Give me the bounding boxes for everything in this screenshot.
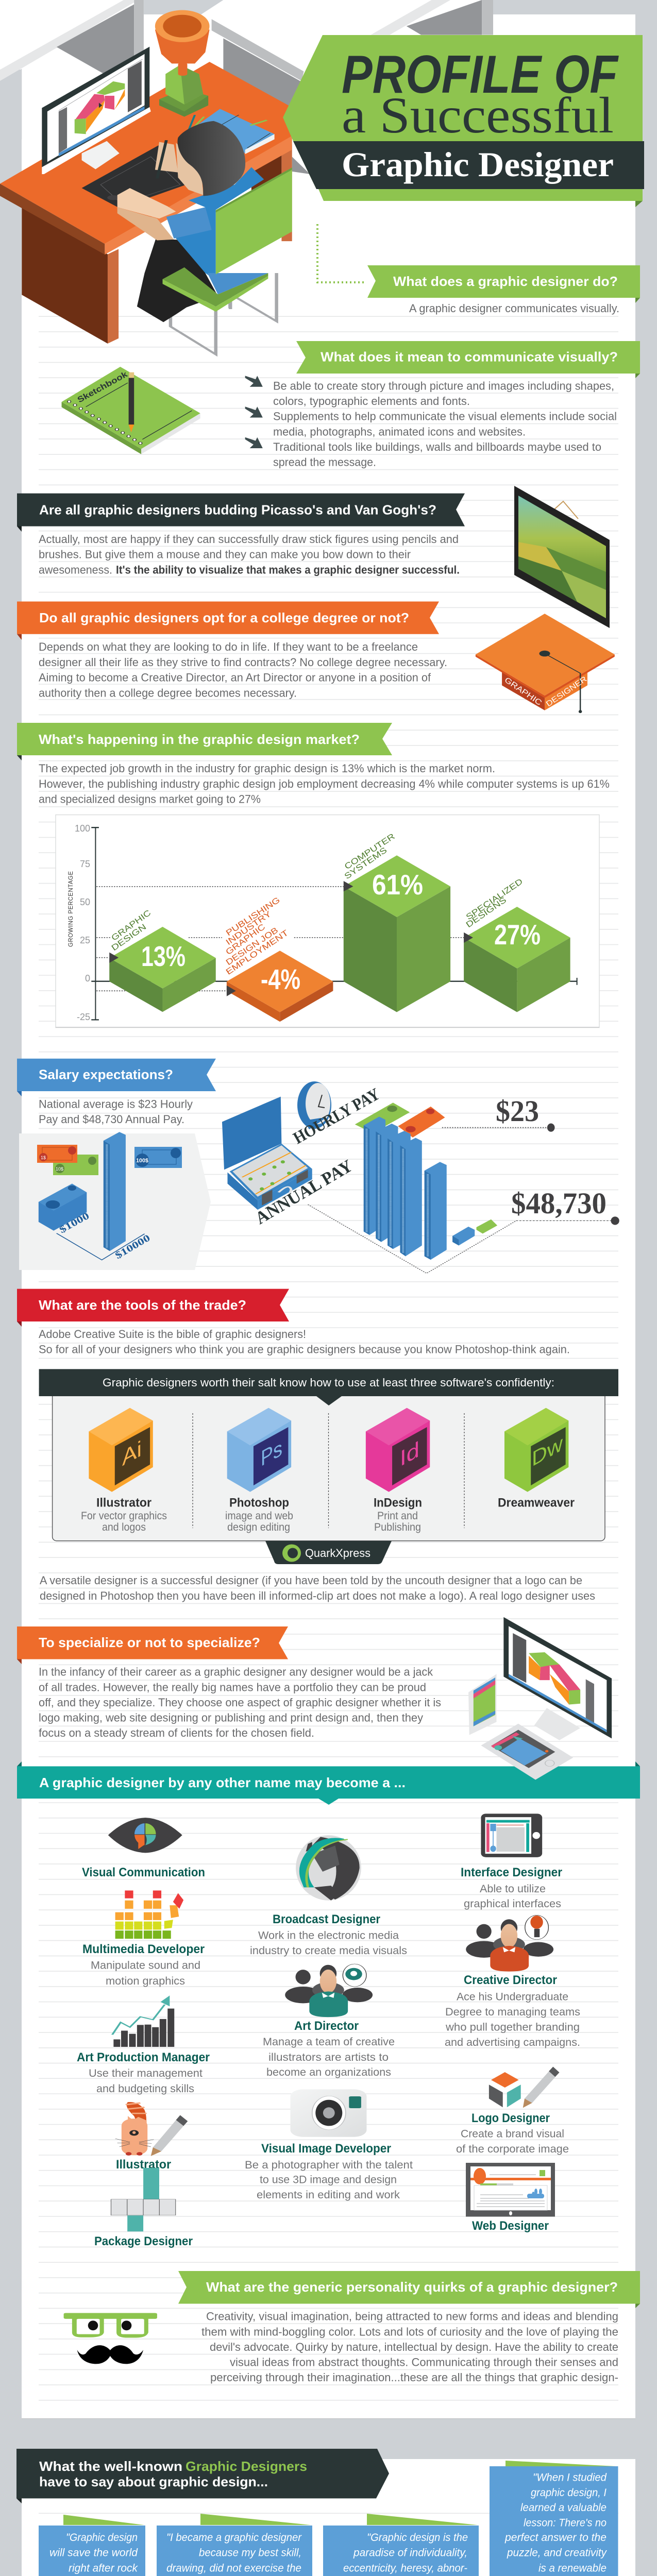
role: creative director: and advertising campaigns. bbox=[445, 2037, 580, 2048]
software: InDesign: Publishing bbox=[374, 1521, 421, 1533]
banner: Picasso and Van Gogh bbox=[17, 494, 465, 532]
desk top bbox=[0, 62, 318, 255]
chair back bbox=[216, 167, 292, 274]
text: Picasso paragraph: Actually, most are happy if they can successfully draw stick figures using pencils and bbox=[39, 533, 459, 546]
banner: any other name: A graphic designer by any other name may become a ... bbox=[39, 1775, 406, 1790]
axis labels: 25 bbox=[80, 935, 90, 945]
role: art director: become an organizations bbox=[266, 2066, 391, 2078]
software: Illustrator bbox=[81, 1408, 167, 1533]
bar: specialized designs 27%: DESIGNS bbox=[465, 896, 508, 929]
role: broadcast designer: Work in the electronic media bbox=[258, 1929, 399, 1941]
banner: personality quirks: What are the generic personality quirks of a graphic designer? bbox=[206, 2279, 618, 2295]
quote card: David Carson: right after rock bbox=[69, 2562, 138, 2574]
designer torso bbox=[167, 167, 264, 280]
text: personality paragraph: Creativity, visual imagination, being attracted to new forms and ideas and blending bbox=[206, 2310, 618, 2323]
banner: salary expectations bbox=[17, 1059, 216, 1096]
banner: personality quirks bbox=[178, 2271, 640, 2308]
software: InDesign: InDesign bbox=[374, 1496, 422, 1510]
bar: publishing -4% bbox=[224, 895, 333, 1022]
quote card: Biz Stone: learned a valuable bbox=[520, 2502, 607, 2514]
bill: orange one dollar bbox=[37, 1145, 77, 1163]
text: market paragraph bbox=[39, 762, 610, 806]
title line 1: PROFILE OF bbox=[342, 45, 619, 105]
text: bullet list: media, photographs, animated icons and websites. bbox=[273, 425, 526, 438]
quote card: George Santayana: paradise of individuality, bbox=[353, 2547, 467, 2559]
software: Photoshop: design editing bbox=[227, 1521, 290, 1533]
role: creative director: Creative Director bbox=[464, 1973, 557, 1987]
quote card: Biz Stone: "When I studied bbox=[533, 2472, 607, 2484]
role: visual communication: Visual Communication bbox=[82, 1866, 205, 1879]
bar: specialized designs 27%: 27% bbox=[494, 919, 541, 951]
text: college paragraph: designer all their life as they strive to find contracts? No college degree necessary. bbox=[39, 656, 447, 669]
role: package designer: Package Designer bbox=[94, 2234, 193, 2248]
icon: graduation cap: GRAPHIC bbox=[503, 675, 544, 707]
quote card: Biz Stone: puzzle, and creativity bbox=[507, 2547, 607, 2559]
text: bullet list: Supplements to help communicate the visual elements include social bbox=[273, 410, 617, 423]
tab: QuarkXpress bbox=[265, 1541, 392, 1564]
role: web designer: Web Designer bbox=[472, 2219, 549, 2233]
bill: blue hundred dollars: 100$ bbox=[136, 1158, 148, 1164]
axis labels: 100 bbox=[75, 823, 90, 834]
banner: well-known designers: Graphic Designers bbox=[186, 2459, 307, 2474]
software: Photoshop bbox=[225, 1408, 293, 1533]
text: versatile designer: A versatile designer is a successful designer (if you have been told by the uncouth designer that a logo can be bbox=[40, 1574, 582, 1587]
quote card: Colin Forbes: because my best skill, bbox=[199, 2547, 301, 2559]
text: adobe: So for all of your designers who think you are graphic designers because you know Photoshop-think again. bbox=[39, 1343, 570, 1356]
role: art production manager: Use their management bbox=[89, 2067, 203, 2079]
bar: computer systems 61%: COMPUTER bbox=[343, 832, 397, 871]
bill: green ten dollars: 10$ bbox=[56, 1166, 63, 1172]
role: art production manager: Art Production Manager bbox=[77, 2050, 210, 2064]
bar: publishing -4%: EMPLOYMENT bbox=[225, 928, 290, 977]
text: bullet list: colors, typographic elements and fonts. bbox=[273, 395, 470, 408]
quote card: Biz Stone bbox=[490, 2461, 618, 2576]
banner: tools of the trade: What are the tools of the trade? bbox=[39, 1297, 246, 1313]
text: versatile designer: designed in Photoshop then you have been ill informed-clip art does not make a logo). A real logo designer uses bbox=[40, 1589, 595, 1602]
bar: graphic design 13%: DESIGN bbox=[110, 923, 148, 953]
bar: computer systems 61%: 61% bbox=[372, 869, 423, 901]
icon: framed painting bbox=[514, 486, 610, 628]
large monitor bbox=[503, 1617, 612, 1740]
banner: communicate visually: What does it mean to communicate visually? bbox=[321, 349, 618, 365]
role: illustrator bbox=[115, 2102, 188, 2172]
text: specialize paragraph: focus on a steady stream of clients for the chosen field. bbox=[39, 1726, 314, 1739]
role: broadcast designer: industry to create media visuals bbox=[250, 1945, 407, 1957]
banner: well-known designers bbox=[16, 2449, 389, 2503]
role: interface designer: Able to utilize bbox=[480, 1883, 546, 1895]
role: visual communication bbox=[82, 1818, 205, 1879]
icon: graduation cap: DESIGNER bbox=[545, 674, 588, 708]
banner: any other name bbox=[17, 1761, 640, 1805]
banner: Picasso and Van Gogh: Are all graphic designers budding Picasso's and Van Gogh's? bbox=[39, 502, 436, 517]
text: Picasso paragraph: awesomeness. bbox=[39, 563, 112, 576]
axis labels: 75 bbox=[80, 859, 90, 869]
role: visual image developer: to use 3D image and design bbox=[260, 2174, 397, 2185]
bracket lines bbox=[57, 1233, 145, 1260]
axis labels bbox=[75, 823, 90, 1022]
role: illustrator: Illustrator bbox=[116, 2158, 171, 2172]
role: broadcast designer bbox=[250, 1835, 407, 1957]
text: bullet list: Be able to create story through picture and images including shapes, bbox=[273, 380, 614, 393]
role: logo designer bbox=[456, 2066, 569, 2155]
quote card: George Santayana: eccentricity, heresy, abnor- bbox=[343, 2562, 467, 2574]
role: visual image developer: Visual Image Developer bbox=[261, 2142, 391, 2156]
bar: graphic design 13%: 13% bbox=[141, 940, 186, 972]
graphics tablet bbox=[82, 145, 187, 208]
text: personality paragraph: visual ideas from abstract thoughts. Communicating through their senses and bbox=[230, 2355, 618, 2369]
text: versatile designer bbox=[40, 1574, 595, 1602]
role: art director: Art Director bbox=[294, 2019, 359, 2033]
panel: software bbox=[39, 1369, 618, 1541]
quote card: Biz Stone: lesson: There's no bbox=[524, 2517, 607, 2529]
text: adobe bbox=[39, 1328, 570, 1356]
role: creative director bbox=[445, 1915, 580, 2048]
role: multimedia developer: Multimedia Developer bbox=[82, 1942, 205, 1956]
bar: specialized designs 27% bbox=[464, 877, 570, 1012]
axis labels: -25 bbox=[77, 1012, 90, 1022]
stack labels: $10000 bbox=[113, 1232, 152, 1261]
role: multimedia developer: motion graphics bbox=[106, 1975, 185, 1987]
role: visual image developer: Be a photographer with the talent bbox=[245, 2159, 413, 2171]
icon: graduation cap bbox=[476, 614, 615, 713]
title line 2: a Successful bbox=[342, 87, 614, 144]
axis title: GROWING PERCENTAGE bbox=[68, 871, 74, 947]
banner: communicate visually bbox=[296, 341, 640, 378]
value: annual pay: $48,730 bbox=[511, 1187, 607, 1220]
quote card: George Santayana: "Graphic design is the bbox=[367, 2532, 468, 2544]
bill: blue hundred dollars bbox=[134, 1147, 182, 1168]
bar: graphic design 13% bbox=[109, 908, 216, 1012]
banner: specialize bbox=[17, 1626, 288, 1664]
text: salary bbox=[39, 1097, 193, 1126]
text: salary: National average is $23 Hourly bbox=[39, 1097, 193, 1110]
quote card: David Carson: will save the world bbox=[49, 2547, 138, 2559]
text: specialize paragraph: logo making, web site designing or publishing and print design and, then they bbox=[39, 1711, 423, 1724]
role: logo designer: of the corporate image bbox=[456, 2143, 569, 2155]
text: bullet list: Traditional tools like buildings, walls and billboards maybe used to bbox=[273, 440, 601, 453]
designer legs bbox=[137, 239, 218, 322]
chair seat bbox=[162, 267, 268, 312]
bill: green ten dollars bbox=[53, 1155, 98, 1175]
banner: college degree: Do all graphic designers opt for a college degree or not? bbox=[39, 610, 409, 625]
icon: monitor and devices bbox=[468, 1617, 612, 1780]
quote card: David Carson bbox=[39, 2515, 145, 2576]
software: InDesign bbox=[366, 1408, 430, 1533]
tab: QuarkXpress: QuarkXpress bbox=[305, 1547, 370, 1560]
bar chart: growing percentage bbox=[56, 815, 599, 1028]
panel: software: Graphic designers worth their salt know how to use at least three software's confidently: bbox=[103, 1376, 554, 1389]
role: logo designer: Create a brand visual bbox=[461, 2128, 564, 2140]
text: college paragraph: authority then a college degree becomes necessary. bbox=[39, 686, 297, 699]
dotted callouts bbox=[308, 1124, 619, 1274]
icon: money stacks bbox=[355, 1103, 497, 1260]
text: market paragraph: and specialized designs market going to 27% bbox=[39, 793, 261, 806]
bill: orange one dollar: 1$ bbox=[41, 1155, 46, 1160]
text: college paragraph: Depends on what they are looking to do in life. If they want to be a freelance bbox=[39, 640, 418, 653]
text: personality paragraph bbox=[201, 2310, 618, 2384]
quote card: Colin Forbes: "I became a graphic designer bbox=[166, 2532, 302, 2544]
label: annual pay: ANNUAL PAY bbox=[252, 1156, 356, 1228]
quote card: Colin Forbes: drawing, did not exercise the bbox=[166, 2562, 301, 2574]
role: visual image developer: elements in editing and work bbox=[257, 2189, 400, 2201]
software: Illustrator: For vector graphics bbox=[81, 1510, 167, 1522]
quote card: Biz Stone: graphic design, I bbox=[531, 2487, 607, 2499]
role: creative director: who pull together branding bbox=[445, 2022, 580, 2033]
banner: well-known designers: have to say about graphic design... bbox=[39, 2474, 268, 2489]
text: specialize paragraph bbox=[39, 1666, 441, 1739]
role: interface designer: graphical interfaces bbox=[464, 1898, 561, 1910]
bar: publishing -4%: PUBLISHING bbox=[225, 895, 282, 938]
role: art production manager: and budgeting skills bbox=[96, 2083, 194, 2095]
role: logo designer: Logo Designer bbox=[471, 2111, 550, 2125]
role: art director: Manage a team of creative bbox=[263, 2036, 395, 2048]
stack: one thousand bbox=[39, 1183, 87, 1231]
role: creative director: Ace his Undergraduate bbox=[457, 1991, 568, 2003]
role: visual image developer bbox=[245, 2089, 413, 2201]
role: art director: illustrators are artists to bbox=[268, 2052, 389, 2063]
text: market paragraph: However, the publishing industry graphic design job employment decreasing 4% while computer systems is up 61% bbox=[39, 777, 610, 790]
role: multimedia developer: Manipulate sound and bbox=[91, 1960, 200, 1971]
banner: well-known designers: What the well-known bbox=[39, 2459, 182, 2474]
chair frame bbox=[171, 273, 277, 354]
text: personality paragraph: devil's advocate. Quirky by nature, intellectual by design. Have the ability to create bbox=[210, 2341, 618, 2353]
text: Picasso paragraph bbox=[39, 533, 460, 576]
banner: salary expectations: Salary expectations? bbox=[39, 1067, 173, 1082]
software: InDesign: Print and bbox=[377, 1510, 418, 1522]
bar: publishing -4%: INDUSTRY bbox=[225, 909, 273, 947]
text: market paragraph: The expected job growth in the industry for graphic design is 13% which is the market norm. bbox=[39, 762, 495, 775]
text: adobe: Adobe Creative Suite is the bible of graphic designers! bbox=[39, 1328, 306, 1341]
banner: design market: What's happening in the graphic design market? bbox=[39, 732, 360, 747]
role: interface designer bbox=[461, 1814, 562, 1910]
value: hourly pay: $23 bbox=[496, 1094, 539, 1128]
text: college paragraph: Aiming to become a Creative Director, an Art Director or anyone in a position of bbox=[39, 671, 431, 684]
designer head bbox=[155, 121, 245, 196]
title line 3: Graphic Designer bbox=[342, 145, 614, 184]
bullet arrows bbox=[245, 376, 263, 448]
text: specialize paragraph: In the infancy of their career as a graphic designer any designer would be a jack bbox=[39, 1666, 433, 1679]
banner: specialize: To specialize or not to specialize? bbox=[39, 1635, 260, 1650]
banner: what does a graphic designer do: What does a graphic designer do? bbox=[393, 274, 618, 289]
quote card: Colin Forbes bbox=[157, 2514, 312, 2576]
panel: money legend bbox=[19, 1132, 211, 1270]
dotted connector bbox=[317, 224, 364, 282]
banner: what does a graphic designer do bbox=[367, 265, 640, 303]
text: designer communicates: A graphic designer communicates visually. bbox=[409, 302, 619, 315]
software: Photoshop: image and web bbox=[225, 1510, 293, 1522]
software: InDesign: Id bbox=[400, 1436, 419, 1471]
label: hourly pay: HOURLY PAY bbox=[290, 1085, 383, 1148]
title banner bbox=[283, 35, 644, 207]
smaller tablet bbox=[481, 1724, 573, 1780]
tablet bbox=[468, 1674, 497, 1735]
text: bullet list bbox=[273, 380, 617, 469]
software: Photoshop: Photoshop bbox=[229, 1496, 289, 1510]
trophy bbox=[155, 10, 210, 116]
role: multimedia developer bbox=[82, 1890, 205, 1987]
software: Illustrator: Illustrator bbox=[96, 1496, 151, 1510]
axis labels: 50 bbox=[80, 897, 90, 907]
quote card: Biz Stone: is a renewable bbox=[538, 2562, 607, 2574]
text: bullet list: spread the message. bbox=[273, 455, 376, 469]
icon: open briefcase bbox=[222, 1096, 312, 1210]
banner: design market bbox=[17, 723, 392, 760]
text: college paragraph bbox=[39, 640, 447, 699]
software: Dreamweaver bbox=[498, 1408, 575, 1510]
sketchbook on desk bbox=[189, 109, 275, 154]
role: package designer bbox=[94, 2168, 193, 2248]
bar: computer systems 61%: SYSTEMS bbox=[343, 846, 389, 881]
software: Illustrator: and logos bbox=[102, 1521, 146, 1533]
stack labels: $1000 bbox=[58, 1210, 91, 1235]
icon: sketchbook bbox=[62, 367, 200, 454]
bar: publishing -4%: DESIGN JOB bbox=[225, 926, 280, 967]
illustration: designer at desk bbox=[0, 10, 318, 354]
icon: sketchbook: Sketchbook bbox=[76, 370, 129, 404]
role: web designer bbox=[466, 2163, 555, 2233]
role: creative director: Degree to managing teams bbox=[445, 2006, 580, 2018]
software: Dreamweaver: Dreamweaver bbox=[498, 1496, 575, 1510]
text: specialize paragraph: off, and they specialize. They choose one aspect of graphic designer whether it is bbox=[39, 1696, 441, 1709]
top architectural frame bbox=[0, 0, 657, 273]
role: broadcast designer: Broadcast Designer bbox=[273, 1912, 380, 1926]
banner: college degree bbox=[17, 602, 439, 640]
bar: graphic design 13%: GRAPHIC bbox=[110, 908, 153, 943]
role: art production manager bbox=[77, 1995, 210, 2095]
software: Illustrator: Ai bbox=[122, 1435, 142, 1471]
role: art director bbox=[263, 1964, 395, 2078]
quote card: George Santayana bbox=[323, 2514, 479, 2576]
software: Photoshop: Ps bbox=[261, 1435, 282, 1471]
bar: publishing -4%: -4% bbox=[261, 963, 300, 995]
bar: specialized designs 27%: SPECIALIZED bbox=[465, 877, 525, 922]
bar: publishing -4%: GRAPHIC bbox=[224, 923, 267, 957]
axis labels: 0 bbox=[85, 973, 90, 984]
designer arm bbox=[117, 188, 212, 240]
icon: glasses and moustache bbox=[64, 2313, 157, 2364]
stack: ten thousand bbox=[104, 1132, 126, 1251]
desk legs bbox=[22, 145, 292, 344]
quote card: David Carson: "Graphic design bbox=[66, 2532, 138, 2544]
software: Dreamweaver: Dw bbox=[532, 1431, 563, 1471]
stack labels bbox=[58, 1210, 152, 1261]
chart axes and guides bbox=[91, 827, 577, 1020]
text: Picasso paragraph: It's the ability to visualize that makes a graphic designer successful. bbox=[116, 563, 460, 576]
text: personality paragraph: perceiving through their imagination...these are all the things that graphic design- bbox=[210, 2371, 618, 2384]
text: personality paragraph: them with mind-boggling color. Lots and lots of curiosity and the love of playing the bbox=[201, 2325, 618, 2338]
text: salary: Pay and $48,730 Annual Pay. bbox=[39, 1113, 184, 1126]
banner: tools of the trade bbox=[17, 1289, 289, 1327]
role: interface designer: Interface Designer bbox=[461, 1866, 562, 1879]
icon: alarm clock bbox=[297, 1081, 331, 1129]
text: Picasso paragraph: brushes. But give them a mouse and they can make you bow down to their bbox=[39, 548, 411, 561]
quote card: Biz Stone: perfect answer to the bbox=[504, 2532, 607, 2544]
bar: computer systems 61% bbox=[343, 832, 450, 1012]
text: specialize paragraph: of all trades. However, the really big names have a portfolio they can be proud bbox=[39, 1681, 426, 1693]
monitor bbox=[42, 47, 151, 174]
